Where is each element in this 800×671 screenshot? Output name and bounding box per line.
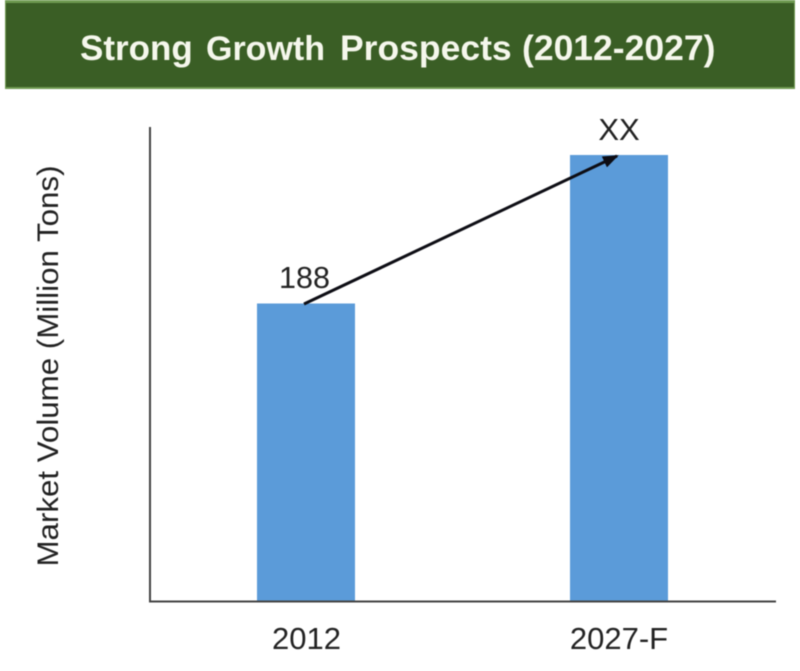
title banner: (2012-2027) <box>522 28 715 68</box>
growth arrow <box>304 156 617 304</box>
category label: 2012: 2012 <box>272 621 341 656</box>
title banner: Growth <box>206 30 325 68</box>
bar: 2027-F <box>570 155 668 602</box>
value label: XX: XX <box>598 112 640 147</box>
value label: 188: 188 <box>279 261 330 295</box>
bar: 2012 <box>257 304 355 602</box>
category label: 2027-F: 2027-F <box>570 621 668 656</box>
title banner: Strong <box>80 29 193 68</box>
title banner <box>5 0 795 89</box>
y-axis title: Market Volume (Million Tons) <box>32 166 65 566</box>
title banner: Prospects <box>340 28 512 68</box>
chart axes <box>150 127 776 602</box>
